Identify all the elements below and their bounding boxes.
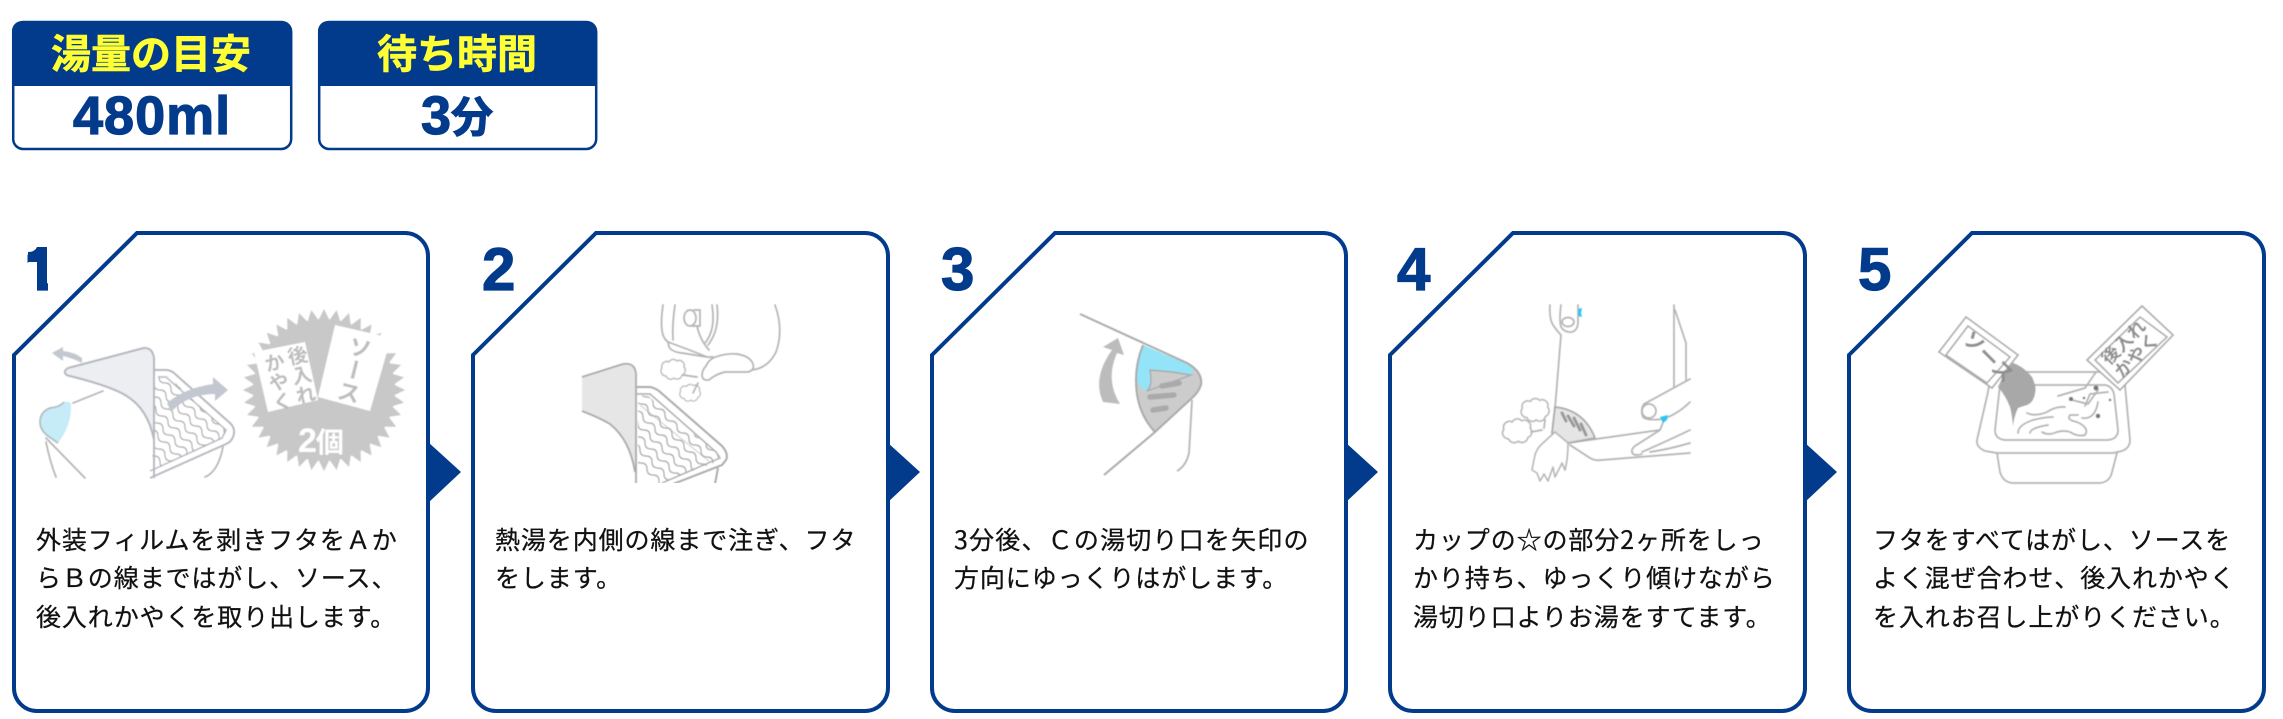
instruction text step 1: 後入れかやくを取り出します。 (36, 598, 396, 634)
instruction text step 3: 3分後、Ｃの湯切り口を矢印の (954, 521, 1310, 557)
illustration: draining water (1503, 305, 1690, 481)
instruction text step 2: をします。 (495, 559, 622, 595)
instruction text step 2 (495, 521, 856, 595)
badge value: 480ml: 480ml (73, 86, 231, 146)
step number 3: 3 (941, 236, 974, 303)
icon: hand (1532, 432, 1568, 481)
packet label: 後入れ: 後入れ (2098, 317, 2150, 369)
arrow: step 3 to 4 (1345, 442, 1378, 503)
panel: step 4 (1390, 233, 1805, 711)
packet label: かやく: かやく (2111, 330, 2163, 382)
instruction text step 1 (36, 521, 398, 634)
illustration: peeling the lid (38, 346, 236, 480)
instruction text step 3 (954, 521, 1310, 595)
icon: steam (661, 359, 700, 401)
packet label: かやく: かやく (259, 351, 294, 414)
step number 1: 1 (24, 236, 57, 303)
instruction text step 5 (1873, 521, 2236, 634)
instruction text step 4 (1413, 521, 1776, 634)
icon: small peel arrow (52, 347, 82, 363)
noodles and toppings (2018, 372, 2108, 436)
instruction text step 5: よく混ぜ合わせ、後入れかやく (1873, 559, 2236, 595)
illustration: peeling drain opening (1080, 314, 1201, 475)
instruction text step 4: カップの☆の部分2ヶ所をしっ (1413, 521, 1764, 557)
packet: topping (2087, 306, 2173, 390)
arrow: step 1 to 2 (428, 442, 461, 503)
instruction text step 3: 方向にゆっくりはがします。 (954, 559, 1288, 595)
packet label: 後入れ: 後入れ (282, 343, 317, 407)
badge: hot water amount (12, 21, 292, 149)
label: 2個: 2個 (298, 422, 344, 460)
instruction text step 1: らＢの線まではがし、ソース、 (36, 559, 397, 595)
panel: step 3 (932, 233, 1346, 711)
icon: steam (1503, 399, 1549, 443)
panel: step 1 (14, 233, 428, 711)
packet label: ソース: ソース (332, 333, 374, 406)
badge: waiting time (318, 21, 597, 149)
panel: step 2 (473, 233, 888, 711)
packet: sauce (1939, 317, 2018, 388)
badge value: 3分: 分 (451, 94, 493, 141)
badge heading: 待ち時間: 待ち時間 (377, 33, 537, 77)
instruction text step 4: 湯切り口よりお湯をすてます。 (1413, 598, 1772, 634)
step number 2: 2 (482, 236, 515, 303)
instruction text step 1: 外装フィルムを剥きフタをＡか (36, 521, 398, 557)
panel: step 5 (1849, 233, 2264, 711)
instruction text step 5: フタをすべてはがし、ソースを (1873, 521, 2231, 557)
illustration: pouring hot water (581, 304, 782, 483)
icon: large peel arrow (167, 377, 228, 412)
arrow: step 2 to 3 (887, 442, 920, 503)
step number 4: 4 (1397, 236, 1431, 303)
step number 5: 5 (1858, 236, 1891, 303)
instruction text step 2: 熱湯を内側の線まで注ぎ、フタ (495, 521, 856, 557)
icon: kettle (662, 305, 780, 380)
instruction text step 4: かり持ち、ゆっくり傾けながら (1413, 559, 1776, 595)
step number 1 (28, 247, 48, 291)
badge value: 3分: 3 (421, 86, 451, 146)
arrow: step 4 to 5 (1804, 442, 1837, 503)
badge heading: 湯量の目安: 湯量の目安 (51, 33, 251, 77)
illustration: adding sauce and topping (1939, 306, 2173, 483)
icon: curved arrow (1099, 338, 1124, 404)
icon: cup (1977, 372, 2130, 483)
packet label: ソース: ソース (1957, 327, 2018, 387)
badge: starburst with 2 packets (243, 309, 405, 471)
icon: star marks (1578, 308, 1582, 317)
instruction text step 5: を入れお召し上がりください。 (1873, 598, 2236, 634)
icon: sauce stream (1998, 362, 2036, 426)
